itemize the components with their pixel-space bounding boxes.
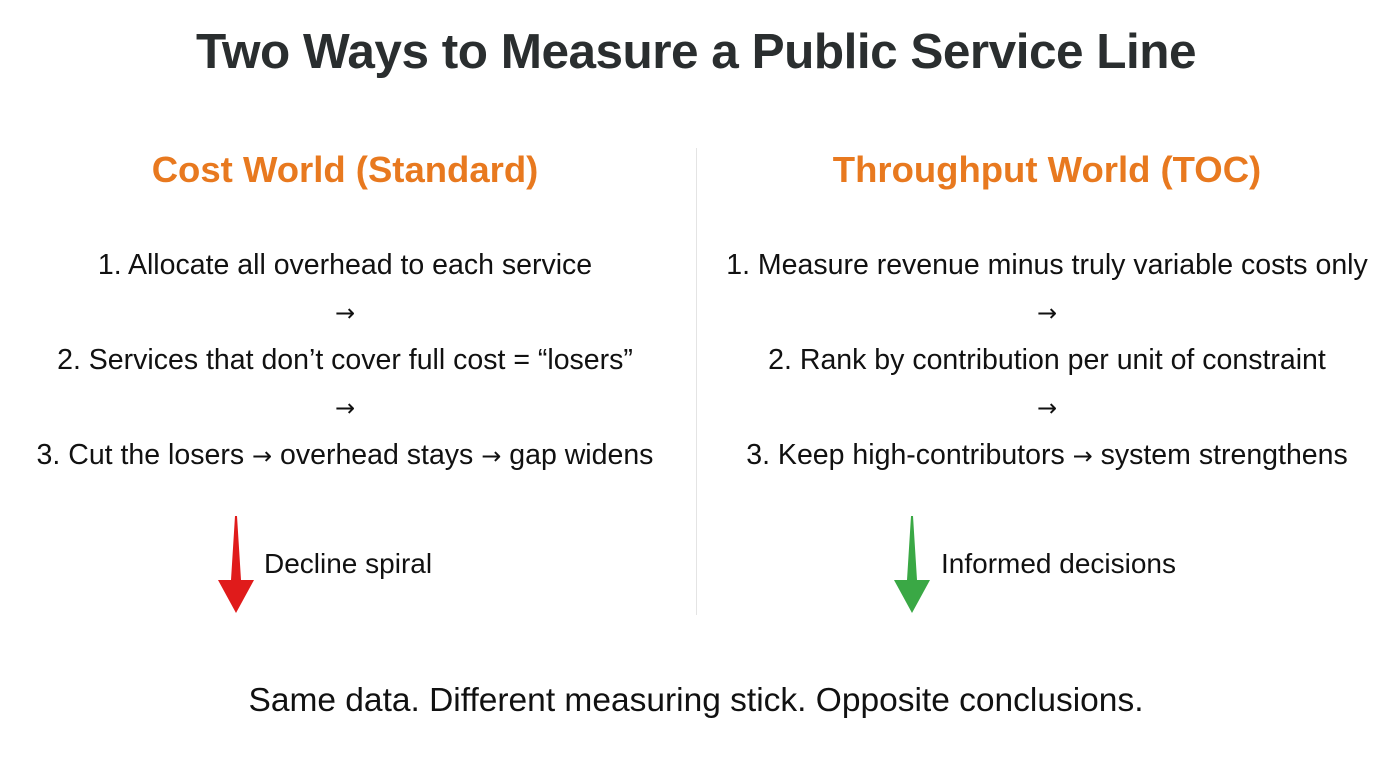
steps: cost world: 3. Cut the losers → overhead stays → gap widens [37,439,653,471]
steps: throughput world: → [1037,299,1057,327]
steps: cost world: 1. Allocate all overhead to each service [98,249,592,281]
heading: cost world: Cost World (Standard) [152,149,538,190]
icon: red down arrow [218,516,254,613]
icon: green down arrow [894,516,930,613]
steps: throughput world: → [1037,394,1057,422]
panel: throughput world [726,149,1368,613]
steps: cost world: → [335,299,355,327]
steps: throughput world [726,249,1368,471]
heading: throughput world: Throughput World (TOC) [833,149,1261,190]
panel: cost world [37,149,653,613]
steps: cost world: 2. Services that don’t cover full cost = “losers” [57,344,633,376]
label: informed decisions: Informed decisions [941,548,1176,579]
steps: cost world [37,249,653,471]
steps: cost world: → [335,394,355,422]
footer tagline: Same data. Different measuring stick. Opposite conclusions. [248,682,1144,719]
steps: throughput world: 3. Keep high-contributors → system strengthens [746,439,1348,471]
label: decline spiral: Decline spiral [264,548,432,579]
title: Two Ways to Measure a Public Service Line [196,24,1196,79]
divider [696,148,697,615]
steps: throughput world: 1. Measure revenue minus truly variable costs only [726,249,1368,281]
steps: throughput world: 2. Rank by contribution per unit of constraint [768,344,1326,376]
